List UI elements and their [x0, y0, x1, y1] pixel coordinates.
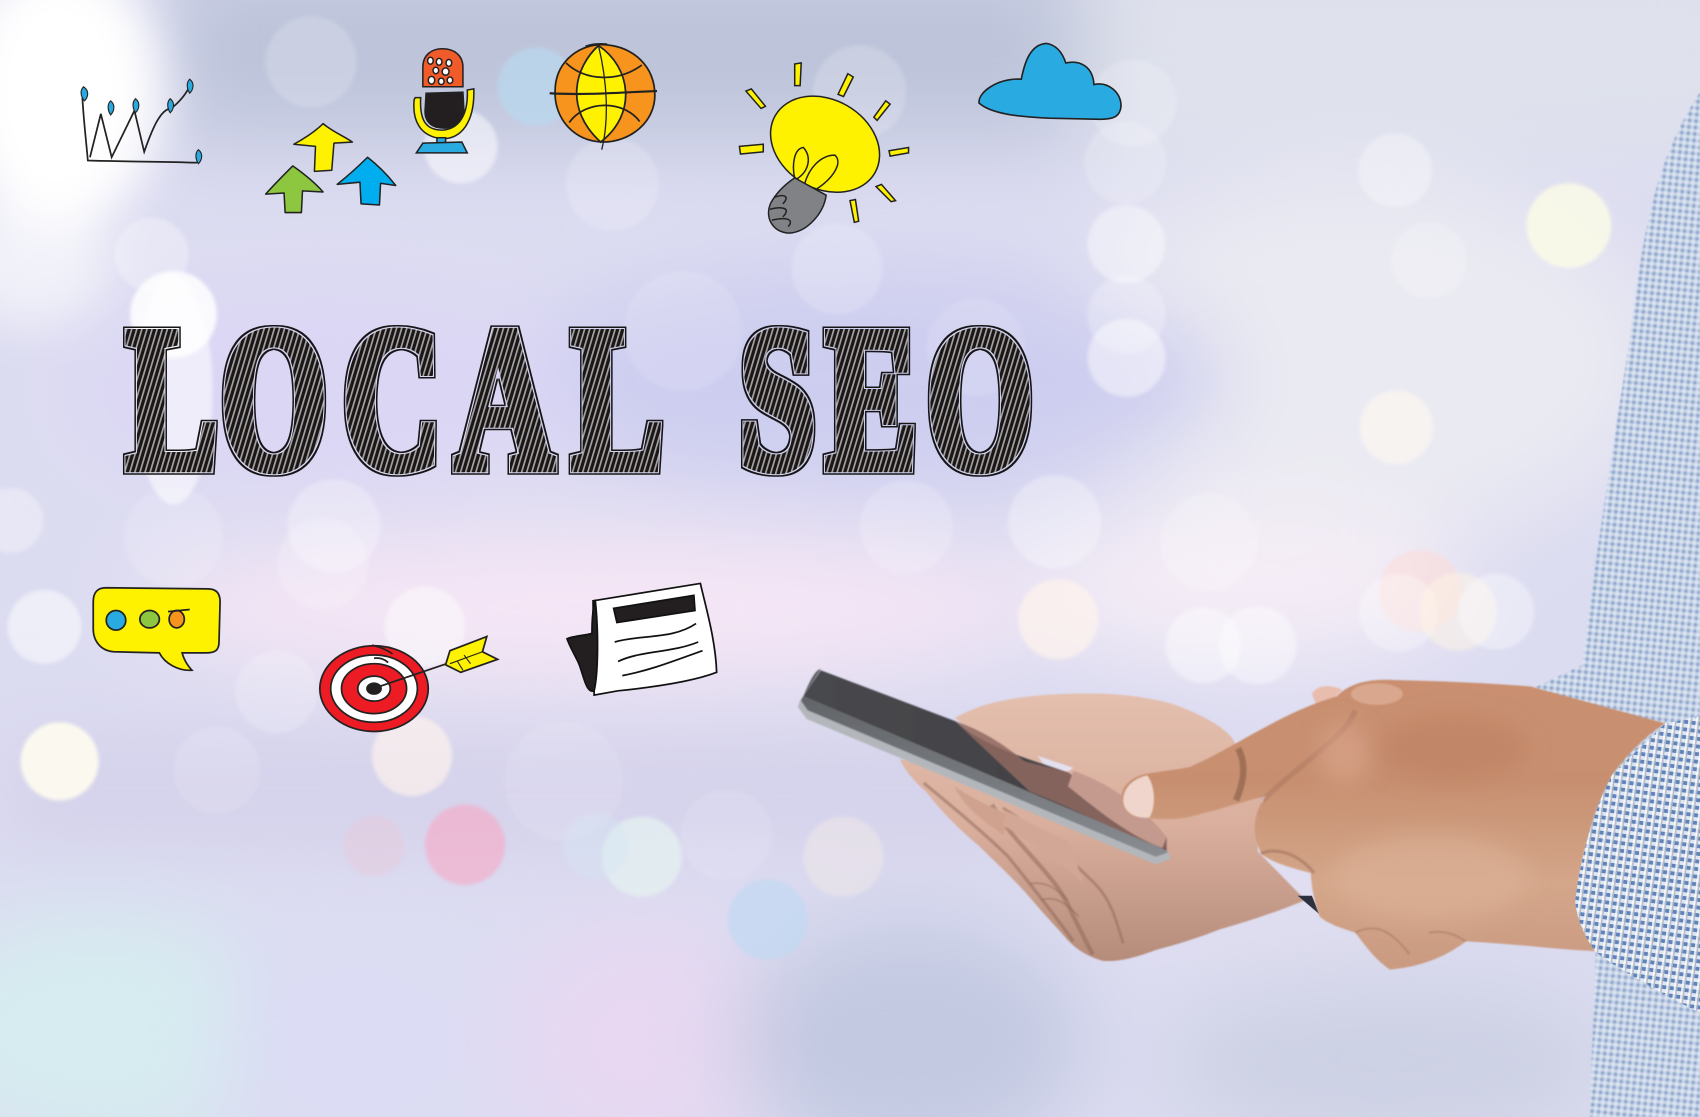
- watch strap: [1298, 896, 1319, 914]
- icon: line chart: [81, 79, 202, 164]
- icon: newspaper: [567, 583, 717, 695]
- left hand fingers: [924, 783, 1123, 954]
- reflection on screen: [955, 721, 1167, 849]
- shirt torso: [1535, 92, 1700, 1117]
- title: LOCAL SEO: [126, 285, 1033, 512]
- phone screen: [803, 670, 1167, 850]
- icon: yellow arrow: [294, 124, 352, 171]
- icon: green arrow: [266, 166, 323, 213]
- icon: microphone: [414, 49, 474, 153]
- shirt cuff: [1575, 716, 1700, 1013]
- right hand: [1121, 680, 1665, 970]
- icon: light bulb: [739, 63, 909, 233]
- smartphone: [798, 669, 1171, 864]
- icon: speech bubble: [93, 588, 220, 670]
- phone body: [800, 669, 1171, 863]
- icon: target with arrow: [320, 637, 498, 731]
- icon: cloud: [979, 43, 1121, 119]
- icon: globe: [550, 44, 657, 150]
- icon: blue arrow: [337, 157, 396, 205]
- icon: arrows: [266, 124, 396, 213]
- left hand: [900, 694, 1305, 961]
